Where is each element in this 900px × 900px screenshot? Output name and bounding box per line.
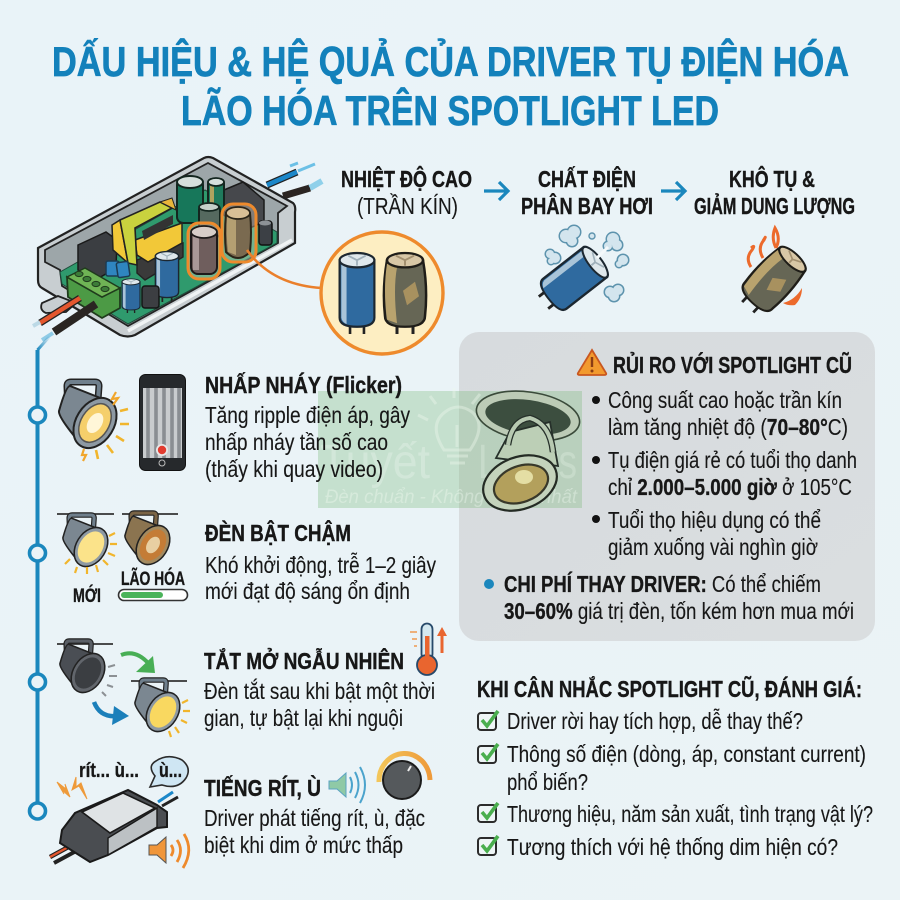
arrow: blue [94,702,129,725]
bullet 1: Công suất cao hoặc trần kín [608,387,842,413]
icon: lamp off [57,641,117,699]
illustration: opened LED driver [33,157,322,340]
description: mới đạt độ sáng ổn định [205,578,410,604]
heading: NHẤP NHÁY (Flicker) [205,371,402,398]
small black capacitor [259,220,272,245]
row: slow start [57,513,436,607]
small navy capacitor [122,279,140,313]
large green capacitor [177,176,203,223]
callout line [247,250,322,288]
process flow [341,165,855,321]
icon: new lamp [57,514,117,574]
PCB [60,190,277,324]
bullet 3 [592,507,821,560]
callout circle [321,232,443,354]
watermark: Đèn chuẩn - Không giá rẻ nhất [325,487,578,508]
heading: ĐÈN BẬT CHẬM [205,519,351,546]
description [205,552,436,604]
row: random on/off [57,624,447,738]
blue capacitor [155,252,179,302]
description: Khó khởi động, trễ 1–2 giây [205,552,436,578]
icon: dimmer knob [379,753,430,799]
row: buzzing noise [50,753,430,868]
icon: orange speaker [149,834,189,868]
bullet 3: giảm xuống vài nghìn giờ [608,534,818,560]
label: aged: LÃO HÓA [121,568,185,590]
arrow [484,182,508,200]
mounting tab [41,296,76,313]
description: Đèn tắt sau khi bật một thời [204,678,435,704]
watermark: Lights [478,436,577,489]
arrow: green [121,653,155,673]
check item 2 [478,741,866,795]
check item 4: Tương thích với hệ thống dim hiện có? [507,834,838,860]
aged capacitor [384,253,426,334]
icon: green speaker [329,767,365,803]
title [52,37,849,134]
step: dry capacitor: KHÔ TỤ & [729,165,815,192]
panel: risk with old spotlights [459,332,875,641]
aged brown capacitor with highlight [222,204,256,262]
step: high temperature [341,165,472,219]
input wires [33,298,96,340]
check item 1: Driver rời hay tích hợp, dễ thay thế? [507,708,803,734]
bullet 3: Tuổi thọ hiệu dụng có thể [608,507,821,533]
driver housing [38,157,295,336]
description [205,402,410,482]
step: dry capacitor [694,165,855,219]
description: nhấp nháy tần số cao [205,429,388,455]
black chip [142,286,159,308]
aged grey capacitor with highlight [188,223,220,279]
description: Tăng ripple điện áp, gây [205,402,410,428]
bullet 2 [592,447,857,500]
arrow [661,182,685,200]
panel content: risks [484,350,857,624]
watermark: Tuyết [320,436,430,489]
check item 2: phổ biến? [507,769,588,795]
icon: thermometer [410,624,447,675]
description: biệt khi dim ở mức thấp [204,832,403,858]
title: LÃO HÓA TRÊN SPOTLIGHT LED [181,86,719,134]
bullet 2: chỉ 2.000–5.000 giờ ở 105°C [608,474,852,500]
icon: sealed driver [50,790,178,863]
icon: dried capacitor with heat [733,228,812,321]
row: flicker [59,371,410,482]
timeline [30,336,50,819]
wires: output [267,163,322,196]
housing interior [45,163,287,326]
housing white rim [128,240,292,331]
icon: sparks [57,777,87,799]
icon: recessed spotlight [473,385,583,520]
icon: flickering spotlight [59,382,129,461]
icon: lamp on [131,680,190,738]
step: electrolyte evaporates: PHÂN BAY HƠI [521,192,653,219]
terminal block [67,268,120,318]
speech bubble: ù... [159,760,182,782]
description: Driver phát tiếng rít, ù, đặc [204,805,425,831]
grey-green capacitor [199,203,220,237]
icon: phone with banding [140,374,186,470]
heatsink [78,232,117,282]
black component [224,182,264,232]
step: electrolyte evaporates [521,165,653,219]
checklist [477,675,873,860]
description [204,678,435,731]
heading: TIẾNG RÍT, Ù [204,774,321,801]
new capacitor [340,253,374,334]
sound text: rít... ù... [79,760,139,782]
description: gian, tự bật lại khi nguội [204,705,403,731]
step: high temperature: NHIỆT ĐỘ CAO [341,165,472,192]
blue film capacitors [106,261,130,278]
driver replacement cost [484,570,854,624]
bullet 1 [592,387,848,440]
step: electrolyte evaporates: CHẤT ĐIỆN [538,165,636,192]
icon: warning [578,350,606,375]
label: new: MỚI [73,585,101,607]
description [204,805,425,858]
watermark [318,388,582,508]
progress bar [118,590,188,600]
speech bubble [150,757,188,787]
step: high temperature: (TRẦN KÍN) [357,192,458,219]
bullet 1: làm tăng nhiệt độ (70–80°C) [608,414,848,440]
driver replacement cost: CHI PHÍ THAY DRIVER: Có thể chiếm [504,570,821,597]
small green capacitor [208,178,224,215]
description: (thấy khi quay video) [205,456,383,482]
icon: aged lamp [122,513,178,571]
icon: capacitor venting steam [532,226,628,318]
heading: TẮT MỞ NGẪU NHIÊN [204,646,404,674]
callout: new vs aged capacitor [247,232,443,354]
transformer [112,198,183,280]
